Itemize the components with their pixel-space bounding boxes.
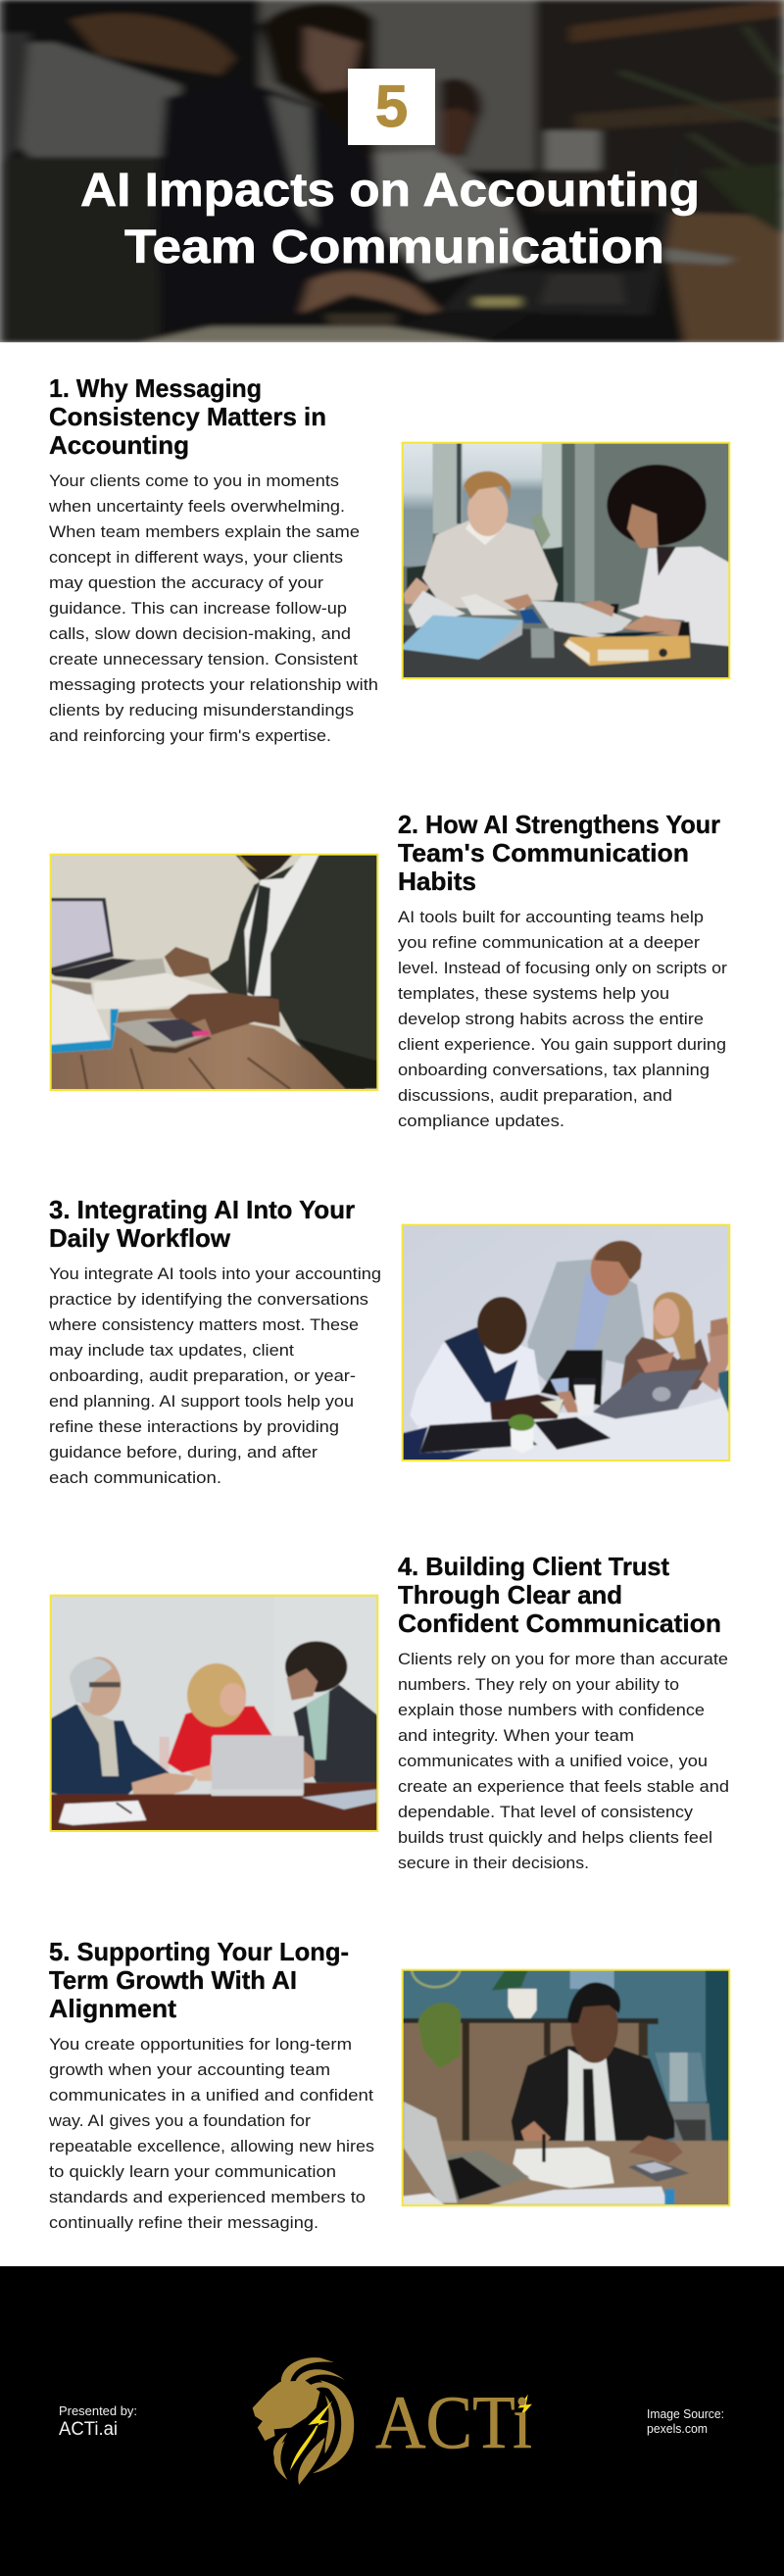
body text 1: When team members explain the same	[49, 522, 360, 541]
image source: pexels.com	[647, 2421, 708, 2436]
body text 1: clients by reducing misunderstandings	[49, 701, 354, 719]
heading 2: 2. How AI Strengthens Your	[398, 810, 720, 839]
body text 4: create an experience that feels stable and	[398, 1777, 729, 1796]
heading 4: Confident Communication	[398, 1609, 721, 1638]
photo 4: three people around a laptop	[50, 1595, 378, 1832]
body text 4: Clients rely on you for more than accurate	[398, 1650, 728, 1668]
body text 5: repeatable excellence, allowing new hires	[49, 2137, 374, 2155]
logo wordmark: ACTi	[375, 2380, 532, 2464]
body text 4: secure in their decisions.	[398, 1854, 589, 1872]
footer	[0, 2266, 784, 2576]
heading 4: 4. Building Client Trust	[398, 1552, 669, 1581]
heading 5: Alignment	[49, 1994, 176, 2023]
body text 4: communicates with a unified voice, you	[398, 1752, 708, 1770]
body text 1: calls, slow down decision-making, and	[49, 624, 351, 643]
heading 4: Through Clear and	[398, 1580, 622, 1610]
logo: lion head with lightning	[253, 2357, 532, 2485]
body text 1: concept in different ways, your clients	[49, 548, 343, 567]
section 1	[48, 373, 730, 745]
body text 3: may include tax updates, client	[49, 1341, 294, 1360]
heading 2: Habits	[398, 867, 476, 896]
presented by	[59, 2403, 137, 2440]
body text 5: communicates in a unified and confident	[49, 2086, 373, 2105]
body text 5: to quickly learn your communication	[49, 2162, 336, 2181]
body text 3: practice by identifying the conversations	[49, 1290, 368, 1309]
number badge	[348, 69, 435, 145]
heading 3	[49, 1195, 355, 1253]
body text 2: compliance updates.	[398, 1112, 564, 1130]
heading 1: Consistency Matters in	[49, 402, 326, 431]
body text 1	[48, 471, 378, 745]
body text 4	[398, 1650, 729, 1872]
body text 1: create unnecessary tension. Consistent	[49, 650, 358, 669]
body text 1: messaging protects your relationship with	[49, 675, 378, 694]
body text 3: onboarding, audit preparation, or year-	[49, 1366, 356, 1385]
section 5	[48, 1937, 730, 2232]
body text 3: You integrate AI tools into your accounting	[49, 1264, 381, 1283]
image source: Image Source:	[647, 2406, 724, 2421]
body text 3	[48, 1264, 381, 1487]
body text 2	[398, 908, 727, 1130]
heading 1: 1. Why Messaging	[49, 373, 262, 403]
heading 5: 5. Supporting Your Long-	[49, 1937, 349, 1966]
body text 2: client experience. You gain support during	[398, 1035, 726, 1054]
body text 5	[48, 2035, 374, 2232]
body text 5: You create opportunities for long-term	[49, 2035, 352, 2054]
heading 5	[49, 1937, 349, 2023]
hero photo: accountants at desk, darkened	[0, 0, 784, 342]
body text 5: way. AI gives you a foundation for	[48, 2111, 311, 2130]
body text 5: growth when your accounting team	[49, 2060, 330, 2079]
section 3	[48, 1195, 730, 1487]
body text 5: continually refine their messaging.	[49, 2213, 318, 2232]
body text 3: refine these interactions by providing	[49, 1417, 339, 1436]
section 2	[50, 810, 727, 1130]
body text 4: dependable. That level of consistency	[398, 1803, 694, 1821]
photo 3: three colleagues at laptop	[402, 1224, 730, 1461]
body text 1: Your clients come to you in moments	[49, 471, 339, 490]
photo 2: man using calculator	[50, 854, 378, 1091]
heading 1: Accounting	[49, 430, 189, 460]
presented by: Presented by:	[59, 2403, 137, 2418]
body text 3: where consistency matters most. These	[48, 1315, 359, 1334]
body text 2: you refine communication at a deeper	[398, 933, 700, 952]
body text 1: and reinforcing your firm's expertise.	[49, 726, 331, 745]
presented by: ACTi.ai	[59, 2419, 118, 2440]
hero banner	[0, 0, 784, 342]
heading 2: Team's Communication	[398, 838, 689, 867]
number badge: 5	[375, 74, 408, 139]
body text 4: builds trust quickly and helps clients feel	[398, 1828, 712, 1847]
body text 1: when uncertainty feels overwhelming.	[48, 497, 345, 516]
body text 2: discussions, audit preparation, and	[398, 1086, 672, 1105]
image source	[647, 2406, 724, 2436]
heading 3: 3. Integrating AI Into Your	[49, 1195, 355, 1224]
section 4	[50, 1552, 729, 1872]
body text 2: AI tools built for accounting teams help	[398, 908, 704, 926]
heading 4	[398, 1552, 721, 1638]
body text 5: standards and experienced members to	[49, 2188, 366, 2206]
body text 4: explain those numbers with confidence	[398, 1701, 705, 1719]
heading 5: Term Growth With AI	[49, 1965, 297, 1995]
title	[80, 165, 700, 273]
body text 2: templates, these systems help you	[398, 984, 669, 1003]
body text 2: level. Instead of focusing only on scripts or	[398, 959, 727, 977]
body text 1: may question the accuracy of your	[49, 573, 323, 592]
body text 2: onboarding conversations, tax planning	[398, 1061, 710, 1079]
body text 3: end planning. AI support tools help you	[49, 1392, 354, 1411]
photo 5: man in suit at desk	[402, 1969, 730, 2206]
title: Team Communication	[124, 222, 664, 273]
body text 2: develop strong habits across the entire	[398, 1010, 704, 1028]
body text 3: each communication.	[49, 1468, 221, 1487]
heading 1	[49, 373, 326, 460]
body text 4: numbers. They rely on your ability to	[398, 1675, 679, 1694]
body text 3: guidance before, during, and after	[49, 1443, 318, 1461]
title: AI Impacts on Accounting	[80, 165, 700, 217]
photo 1: two colleagues reviewing binders	[402, 442, 730, 679]
heading 3: Daily Workflow	[49, 1223, 231, 1253]
body text 4: and integrity. When your team	[398, 1726, 634, 1745]
body text 1: guidance. This can increase follow-up	[49, 599, 347, 618]
heading 2	[398, 810, 720, 896]
